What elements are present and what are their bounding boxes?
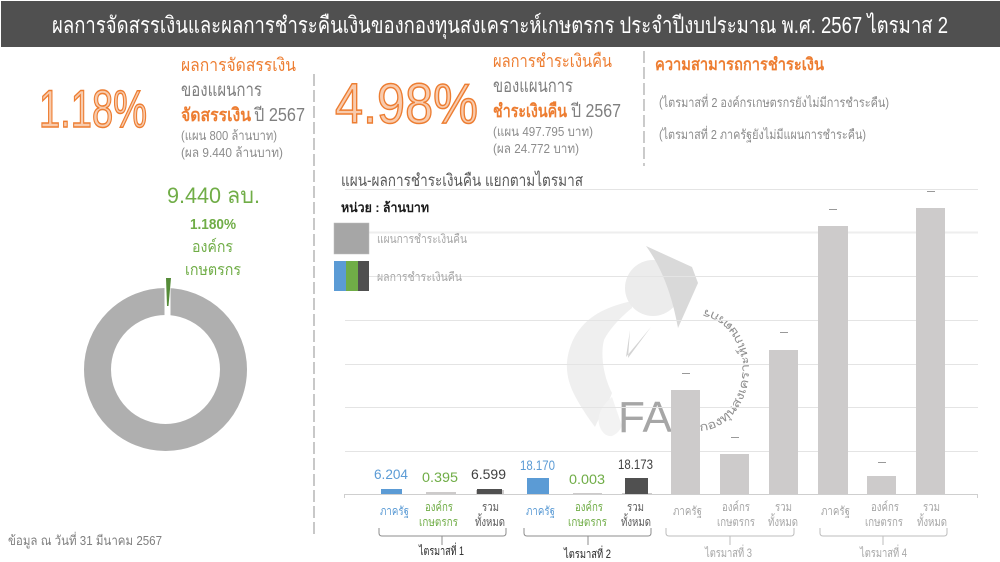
allocation description: (แผน 800 ล้านบาท) — [181, 128, 277, 143]
repayment description: ของแผนการ — [493, 76, 573, 97]
quarter labels: ไตรมาสที่ 3 — [704, 544, 752, 560]
quarter labels — [418, 542, 907, 561]
category labels: รวม — [482, 500, 499, 514]
category labels: รวม — [775, 500, 792, 514]
legend labels: ผลการชำระเงินคืน — [377, 270, 462, 284]
quarter 1 bars — [381, 489, 504, 494]
category labels: องค์กร — [722, 500, 750, 514]
category labels: รวม — [627, 500, 644, 514]
category labels: ภาครัฐ — [380, 504, 409, 518]
donut value label: องค์กร — [192, 237, 233, 256]
big number: repayment percent: 4.98% — [335, 72, 478, 136]
category labels: องค์กร — [871, 500, 899, 514]
chart heading: แผน-ผลการชำระเงินคืน แยกตามไตรมาส — [341, 170, 583, 190]
category labels: รวม — [923, 500, 940, 514]
watermark logo: กองทุนสงเคราะห์เกษตรกร — [700, 310, 749, 431]
legend swatch: plan — [334, 223, 369, 254]
footer note: ข้อมูล ณ วันที่ 31 มีนาคม 2567 — [8, 532, 162, 549]
bar chart: plan vs repayment by quarter — [344, 190, 978, 561]
repayment description — [493, 51, 621, 156]
chart gridlines — [344, 190, 978, 498]
legend swatch: result — [334, 261, 369, 291]
category labels: ทั้งหมด — [768, 513, 798, 529]
capacity heading: ความสามารถการชำระเงิน — [655, 55, 824, 74]
bar value dashes — [682, 192, 935, 462]
bar values: 18.170 — [520, 457, 555, 473]
bar values: 6.204 — [374, 466, 408, 482]
category labels: ภาครัฐ — [673, 504, 702, 518]
donut value label: 9.440 ลบ. — [167, 183, 260, 208]
legend labels: แผนการชำระเงินคืน — [377, 232, 467, 246]
panel: allocation result — [39, 55, 305, 438]
allocation description — [181, 55, 305, 160]
allocation description: (ผล 9.440 ล้านบาท) — [181, 145, 283, 160]
repayment description: (แผน 497.795 บาท) — [493, 124, 593, 139]
repayment description: ปี 2567 — [571, 101, 621, 121]
quarter braces — [379, 528, 947, 545]
quarter 3 bars — [671, 350, 798, 494]
bar values: 0.395 — [422, 469, 458, 485]
panel: repayment capacity — [655, 55, 889, 143]
category labels: เกษตรกร — [717, 515, 755, 529]
donut value label: เกษตรกร — [185, 262, 241, 279]
category labels: ภาครัฐ — [821, 504, 850, 518]
category labels: เกษตรกร — [568, 515, 607, 529]
panel: repayment result — [335, 51, 621, 156]
donut chart — [98, 278, 234, 438]
category labels — [380, 500, 947, 529]
allocation description: ของแผนการ — [181, 80, 262, 101]
quarter labels: ไตรมาสที่ 4 — [859, 544, 907, 560]
legend labels — [377, 232, 467, 284]
category labels: ทั้งหมด — [475, 513, 505, 529]
watermark logo: FA — [618, 393, 673, 442]
category labels: องค์กร — [425, 500, 453, 514]
category labels: เกษตรกร — [419, 515, 458, 529]
bar values: 6.599 — [471, 466, 506, 482]
bar values: 0.003 — [569, 471, 605, 487]
legend — [334, 223, 467, 291]
allocation description: ปี 2567 — [254, 105, 305, 125]
category labels: ทั้งหมด — [917, 513, 947, 529]
capacity notes: (ไตรมาสที่ 2 องค์กรเกษตรกรยังไม่มีการชำระคืน) — [659, 94, 889, 110]
bar values — [374, 456, 653, 487]
repayment description: ชำระเงินคืน — [493, 101, 568, 121]
watermark logo — [567, 246, 749, 442]
quarter labels: ไตรมาสที่ 1 — [418, 542, 464, 558]
category labels: ภาครัฐ — [526, 504, 555, 518]
category labels: ทั้งหมด — [621, 513, 651, 529]
big number: allocation percent: 1.18% — [39, 80, 147, 139]
title bar — [1, 1, 1000, 47]
capacity notes — [659, 94, 889, 143]
category labels: เกษตรกร — [865, 515, 903, 529]
capacity notes: (ไตรมาสที่ 2 ภาครัฐยังไม่มีแผนการชำระคืน) — [659, 126, 866, 143]
bar values: 18.173 — [618, 456, 653, 472]
allocation description: จัดสรรเงิน — [181, 105, 252, 125]
unit label: หน่วย : ล้านบาท — [341, 200, 429, 215]
donut value label — [167, 183, 260, 279]
allocation description: ผลการจัดสรรเงิน — [181, 55, 296, 75]
quarter 2 bars — [527, 478, 652, 494]
category labels: องค์กร — [575, 500, 603, 514]
repayment description: (ผล 24.772 บาท) — [493, 141, 579, 156]
repayment description: ผลการชำระเงินคืน — [493, 51, 612, 71]
donut value label: 1.180% — [190, 216, 236, 233]
quarter 4 bars — [818, 208, 945, 494]
quarter labels: ไตรมาสที่ 2 — [563, 545, 611, 561]
